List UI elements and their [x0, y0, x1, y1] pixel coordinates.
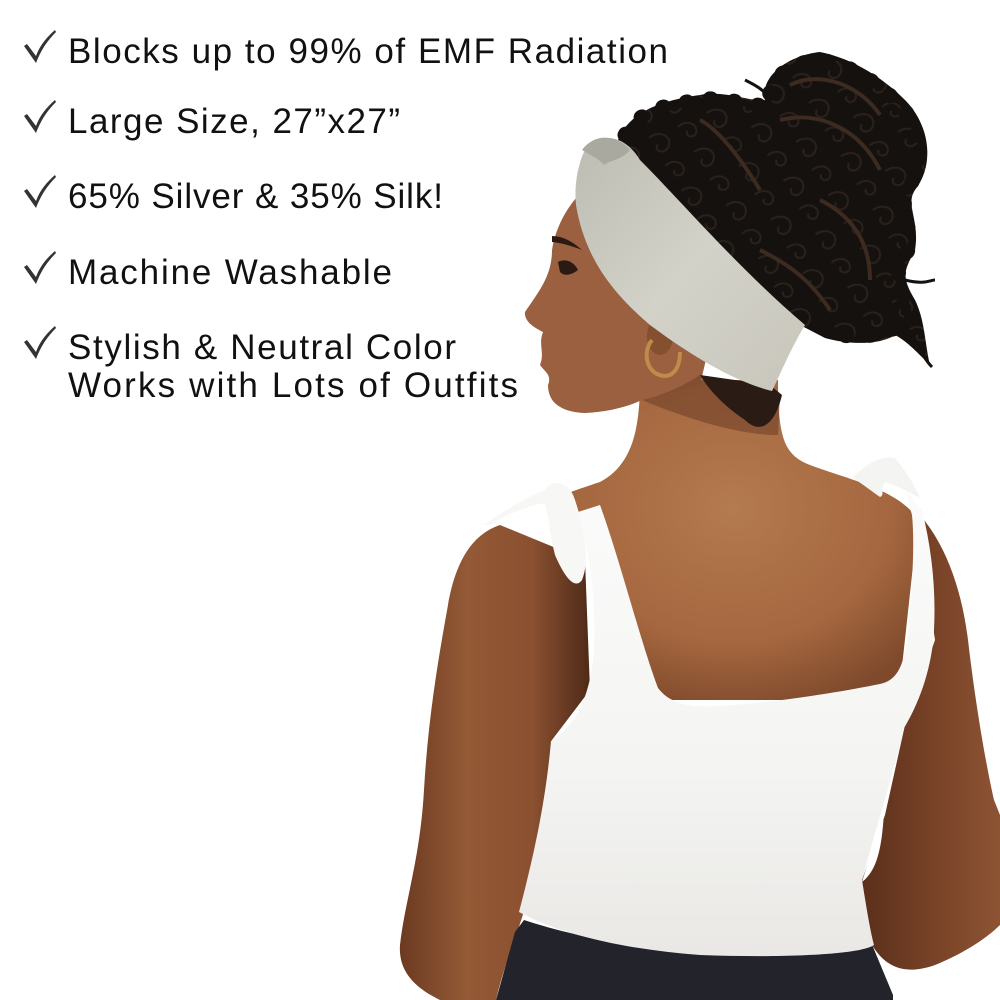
nape hair	[700, 375, 782, 427]
item: material: 65% Silver & 35% Silk!	[68, 177, 443, 216]
item: EMF radiation: Blocks up to 99% of EMF Radiation	[68, 32, 668, 71]
item: style: Stylish & Neutral Color	[68, 328, 456, 367]
check icon	[24, 175, 56, 208]
ear	[647, 317, 673, 355]
headband	[575, 138, 805, 391]
item: washable: Machine Washable	[68, 253, 392, 292]
curly hair edge	[625, 60, 919, 336]
check icon	[24, 251, 56, 284]
neck and back skin	[548, 380, 918, 700]
check icon	[24, 100, 56, 133]
left arm	[400, 525, 590, 1000]
right arm	[861, 510, 1000, 970]
right tie bow	[852, 457, 920, 498]
eye and brow	[552, 236, 582, 275]
hair in front of ear	[618, 275, 650, 320]
hoop earring	[647, 340, 680, 376]
tank top	[519, 490, 934, 956]
face	[525, 185, 720, 413]
jeans	[496, 920, 893, 1000]
brown hair highlights	[700, 79, 880, 310]
loose curls	[745, 80, 935, 367]
headband knot	[582, 138, 630, 165]
checklist	[24, 30, 668, 405]
left tie bow	[484, 483, 586, 584]
check icon	[24, 30, 56, 63]
gap between tank and arm	[862, 812, 884, 882]
check icon	[24, 326, 56, 359]
photo: woman seen from behind wearing headband	[400, 52, 1000, 1000]
item: size: Large Size, 27”x27”	[68, 102, 400, 141]
hair	[618, 52, 935, 367]
item: style: Works with Lots of Outfits	[68, 366, 518, 405]
shadow on neck under jaw	[642, 375, 780, 435]
item: style	[24, 326, 518, 405]
